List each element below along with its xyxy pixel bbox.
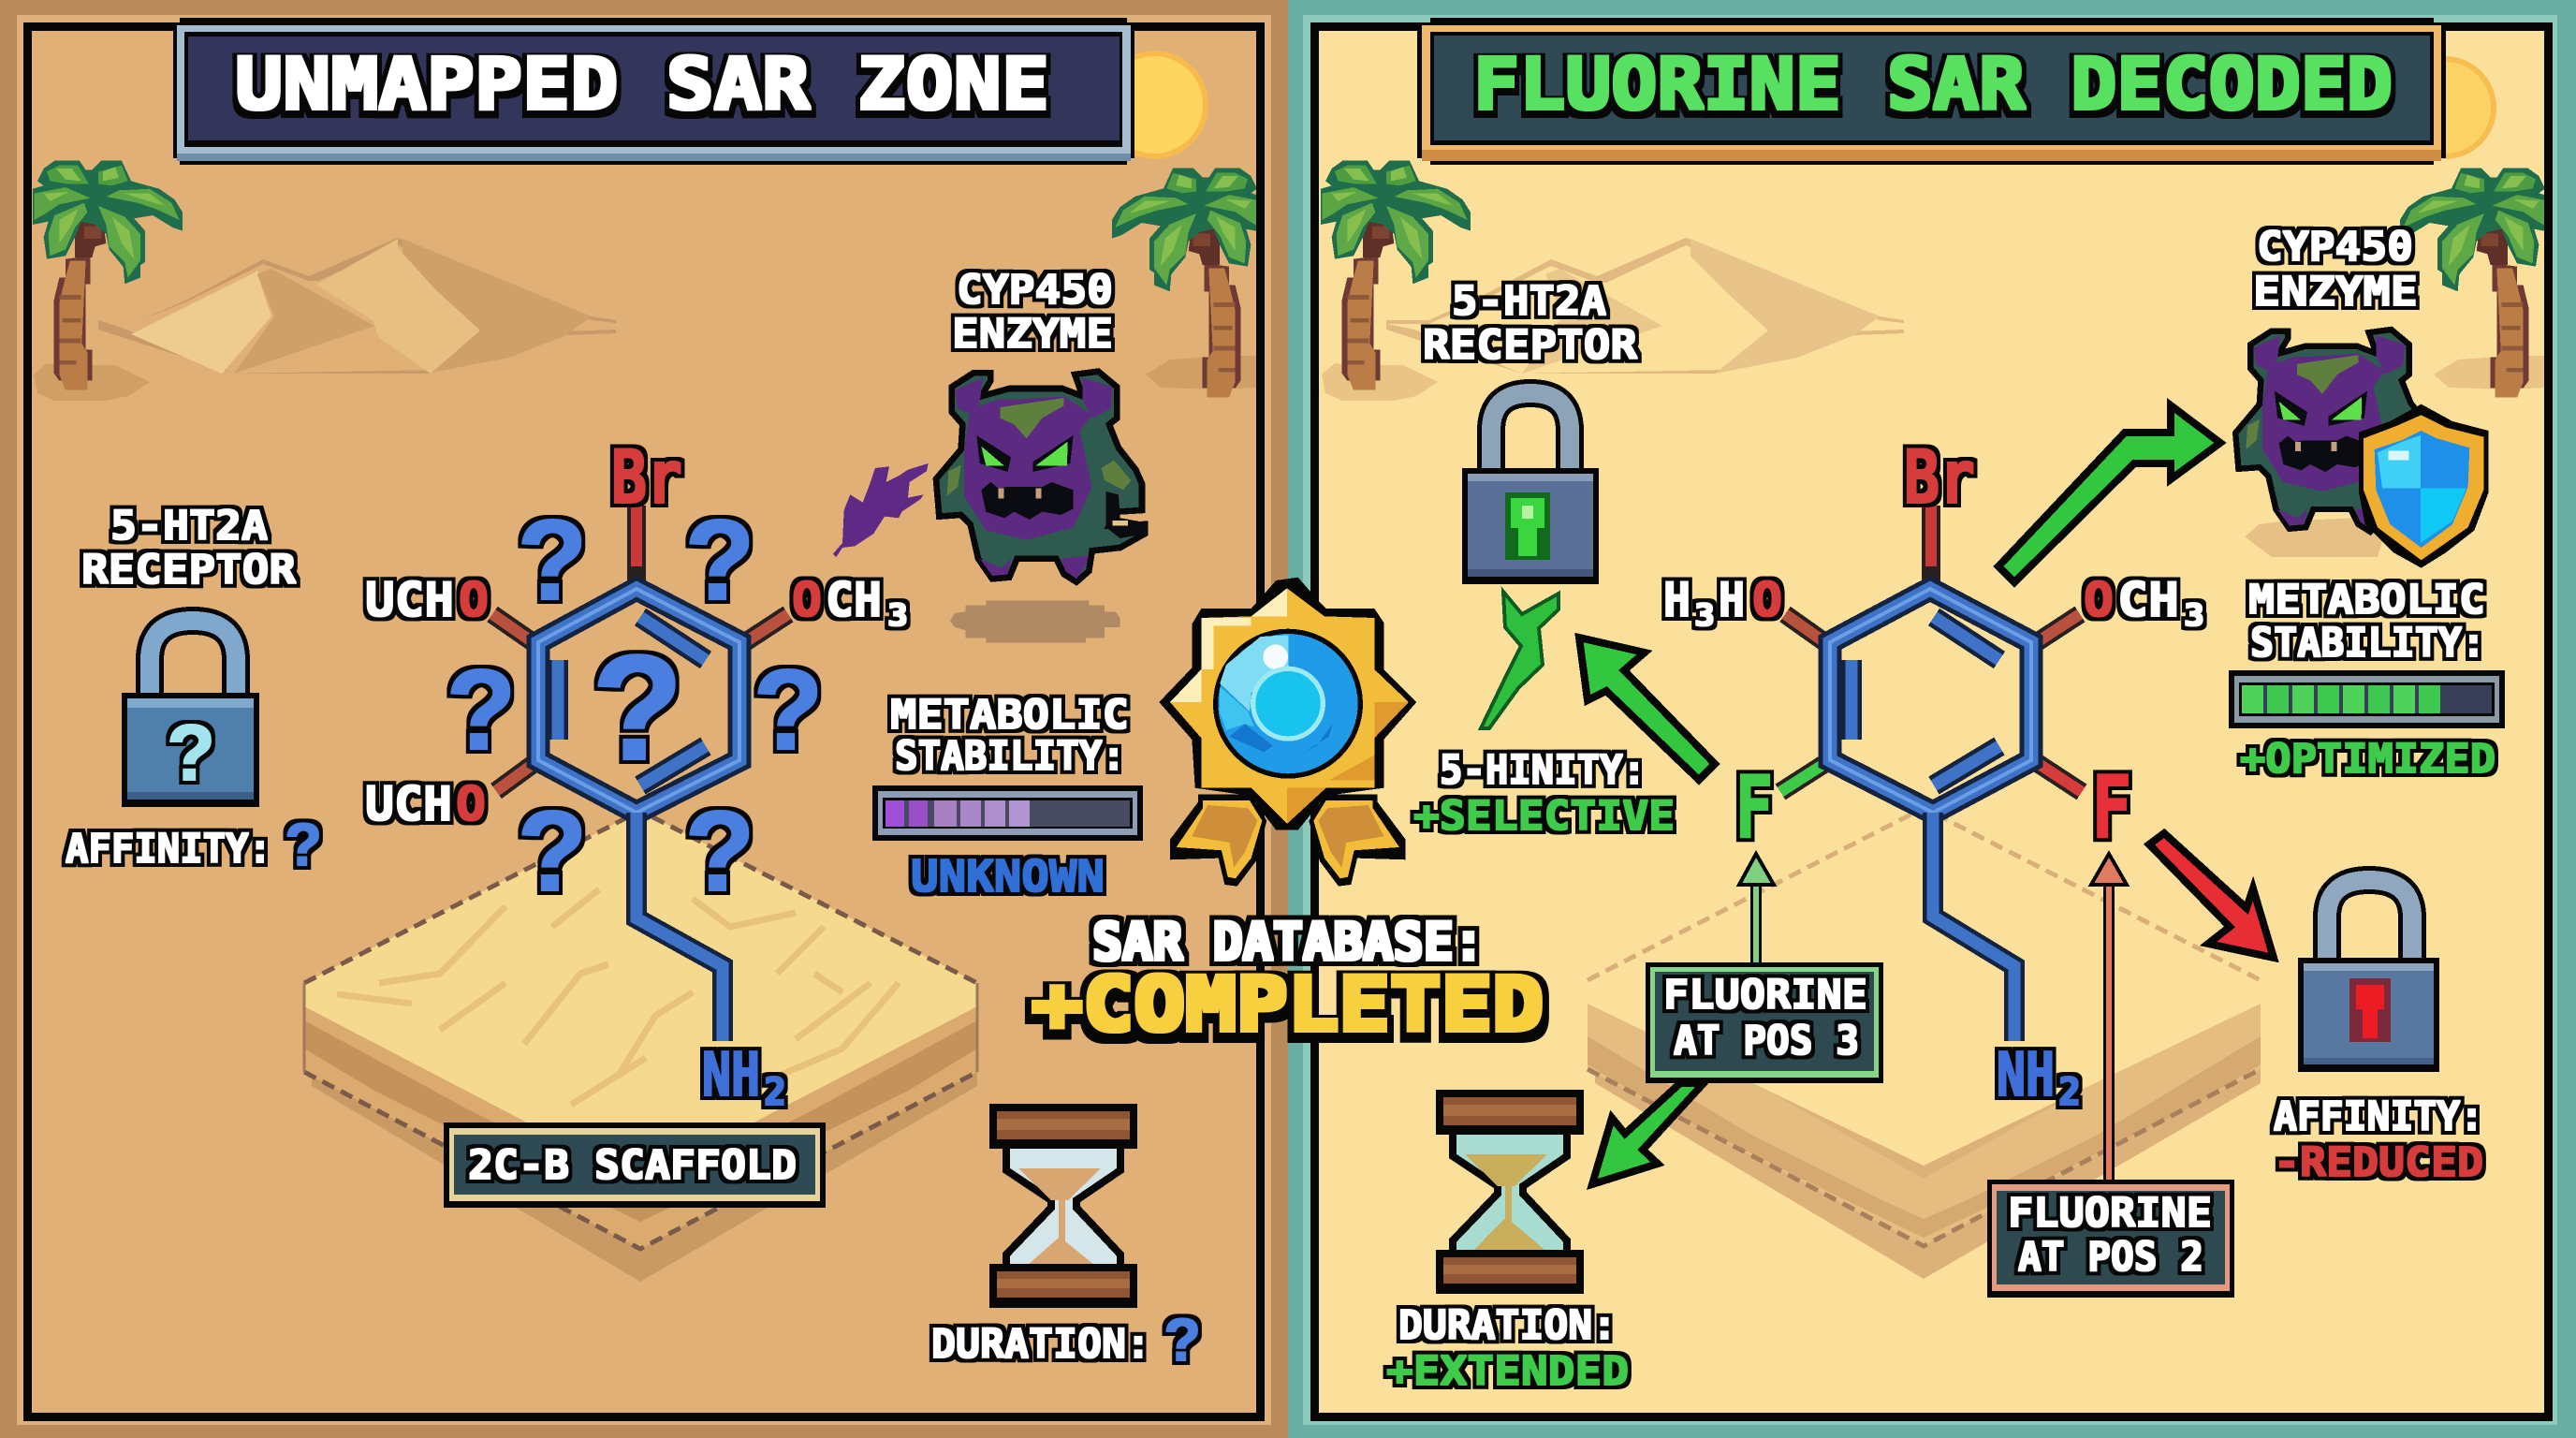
duration label: ?: [1164, 1306, 1201, 1373]
H3HO label: 3: [1694, 597, 1715, 633]
receptor label: RECEPTOR: [1423, 322, 1637, 369]
OCH3 right: 3: [887, 597, 908, 633]
OCH3 label: CH: [2117, 573, 2179, 627]
selectivity label: 5-HINITY:: [1440, 747, 1646, 794]
NH2 label: NH: [702, 1041, 760, 1110]
palm tree left: [33, 161, 183, 401]
H3HO label: O: [1752, 573, 1782, 627]
arrow: to enzyme: [1998, 405, 2220, 582]
question marks: ?: [592, 624, 683, 791]
gem: [1213, 629, 1363, 779]
callout: fluorine at pos 2: [1987, 1180, 2234, 1298]
Br label: Br: [1904, 436, 1975, 521]
icon: hourglass: [989, 1104, 1137, 1308]
duration label: DURATION:: [931, 1321, 1150, 1368]
H3HO label: H: [1719, 573, 1745, 627]
metabolic stability label: [2248, 577, 2485, 667]
OCH3 label: 3: [2184, 597, 2204, 633]
palm tree left: [1321, 161, 1471, 401]
OCH3 label: [2084, 573, 2204, 633]
sand platform: [304, 811, 977, 1282]
scaffold label: 2C-B SCAFFOLD: [468, 1142, 797, 1189]
receptor label: [81, 503, 296, 594]
enzyme shadow: [950, 601, 1120, 643]
molecule: 2C-B scaffold: [365, 436, 908, 1114]
fluorine green: F: [1735, 757, 1773, 858]
database status: [1032, 912, 1544, 1048]
selectivity label: [1413, 747, 1675, 840]
molecule: fluorinated 2C-B: [1663, 436, 2204, 1114]
panel frame: [28, 26, 1260, 1417]
callout: fluorine at pos 3: FLUORINE: [1663, 972, 1867, 1019]
OCH upper left: O: [459, 573, 489, 627]
enzyme label: CYP450: [2257, 224, 2413, 271]
OCH3 right: O: [792, 573, 822, 627]
Br label: Br: [611, 436, 682, 521]
purple metabolic wisp: [833, 463, 929, 557]
NH2 label: NH: [1997, 1041, 2055, 1110]
callout: fluorine at pos 2: AT POS 2: [2018, 1234, 2203, 1281]
question marks: ?: [446, 646, 516, 773]
NH2 label: 2: [764, 1071, 786, 1114]
H3HO label: [1663, 573, 1782, 633]
star body: [1159, 578, 1416, 830]
title text: FLUORINE SAR DECODED: [1473, 42, 2393, 125]
arrow: fluorine 3 pointer: [1739, 854, 1774, 964]
reduced affinity label: AFFINITY:: [2274, 1093, 2483, 1140]
unknown label: UNKNOWN: [911, 851, 1105, 902]
panel: fluorine SAR decoded: [1288, 0, 2576, 1438]
reduced affinity label: -REDUCED: [2274, 1139, 2483, 1186]
callout: fluorine at pos 3: [1646, 962, 1883, 1083]
question marks: ?: [518, 787, 587, 915]
OCH3 right: CH: [826, 573, 882, 627]
background dunes: [1386, 238, 1904, 374]
OCH upper left: [365, 573, 489, 627]
icon: lock unknown: [122, 621, 259, 807]
enzyme shadow: [2245, 518, 2384, 557]
OCH lower left: UCH: [365, 777, 452, 831]
stability bar unknown: [872, 785, 1143, 841]
optimized label: +OPTIMIZED: [2240, 736, 2496, 783]
metabolic stability label: STABILITY:: [2250, 620, 2485, 667]
callout: fluorine at pos 2: FLUORINE: [2008, 1190, 2212, 1237]
enzyme label: CYP450: [957, 267, 1113, 314]
metabolic stability label: METABOLIC: [890, 692, 1129, 739]
benzene ring: [1830, 589, 2031, 813]
icon: lock selective: [1462, 393, 1599, 584]
OCH3 right: [792, 573, 908, 633]
OCH upper left: UCH: [365, 573, 454, 627]
enzyme label: [952, 267, 1113, 358]
NH2 label: 2: [2058, 1071, 2081, 1114]
duration label: [931, 1306, 1201, 1373]
bonds to substituents: [1780, 506, 2082, 792]
question marks: ?: [685, 787, 754, 915]
metabolic stability label: [890, 692, 1129, 780]
metabolic stability label: METABOLIC: [2248, 577, 2485, 624]
sand platform: [1588, 808, 2261, 1279]
background dunes: [98, 238, 616, 374]
ribbons: [1170, 794, 1406, 887]
palm tree right: [2400, 169, 2550, 398]
duration label: DURATION:: [1398, 1302, 1617, 1349]
question marks: ?: [518, 496, 587, 624]
affinity label: AFFINITY:: [66, 826, 271, 873]
enzyme label: ENZYME: [952, 311, 1113, 358]
database status: SAR DATABASE:: [1092, 912, 1484, 972]
callout: fluorine at pos 3: AT POS 3: [1674, 1018, 1859, 1064]
arrow: to receptor: [1579, 638, 1715, 780]
title banner: [1417, 18, 2446, 165]
selectivity label: +SELECTIVE: [1413, 793, 1675, 840]
OCH lower left: O: [456, 777, 486, 831]
question marks: ?: [754, 646, 823, 773]
scaffold label: [444, 1123, 826, 1208]
affinity label: ?: [285, 811, 322, 878]
fluorine red: F: [2092, 757, 2131, 858]
duration label: +EXTENDED: [1386, 1348, 1629, 1395]
duration label: [1386, 1302, 1629, 1395]
reduced affinity label: [2274, 1093, 2483, 1186]
receptor label: 5-HT2A: [1452, 278, 1606, 325]
bonds to substituents: [492, 506, 788, 791]
icon: lock reduced: [2298, 880, 2439, 1072]
icon: hourglass: [1436, 1090, 1584, 1294]
receptor label: RECEPTOR: [81, 547, 296, 594]
palm tree right: [1112, 169, 1262, 398]
OCH3 label: O: [2084, 573, 2114, 627]
question marks: ?: [685, 496, 754, 624]
icon: enzyme monster: [2235, 330, 2437, 532]
sun: [2396, 59, 2494, 156]
panel: unmapped SAR zone: [0, 0, 1288, 1438]
metabolic stability label: STABILITY:: [895, 733, 1125, 780]
title text: UNMAPPED SAR ZONE: [235, 42, 1049, 125]
enzyme label: ENZYME: [2253, 269, 2418, 315]
panel frame: [1314, 26, 2548, 1417]
central medal: [1159, 578, 1416, 887]
arrow: to hourglass: [1592, 1083, 1704, 1184]
amine tail: [1933, 813, 2014, 1041]
receptor label: 5-HT2A: [110, 503, 268, 550]
icon: green binding fork: [1481, 592, 1559, 728]
arrow: to reduced affinity: [2149, 833, 2274, 958]
icon: enzyme monster: [936, 372, 1147, 582]
benzene ring: [538, 589, 739, 813]
database status: +COMPLETED: [1032, 963, 1544, 1048]
stability bar optimized: [2229, 670, 2505, 728]
sun: [1103, 53, 1206, 156]
icon: shield: [2359, 404, 2488, 568]
question marks: [446, 496, 823, 915]
title banner: [173, 18, 1134, 165]
affinity label: [66, 811, 322, 878]
H3HO label: H: [1663, 573, 1690, 627]
arrow: fluorine 2 pointer: [2091, 854, 2127, 1181]
icon: lock unknown: ?: [167, 709, 215, 797]
receptor label: [1423, 278, 1637, 369]
amine tail: [637, 813, 723, 1041]
enzyme label: [2253, 224, 2418, 315]
